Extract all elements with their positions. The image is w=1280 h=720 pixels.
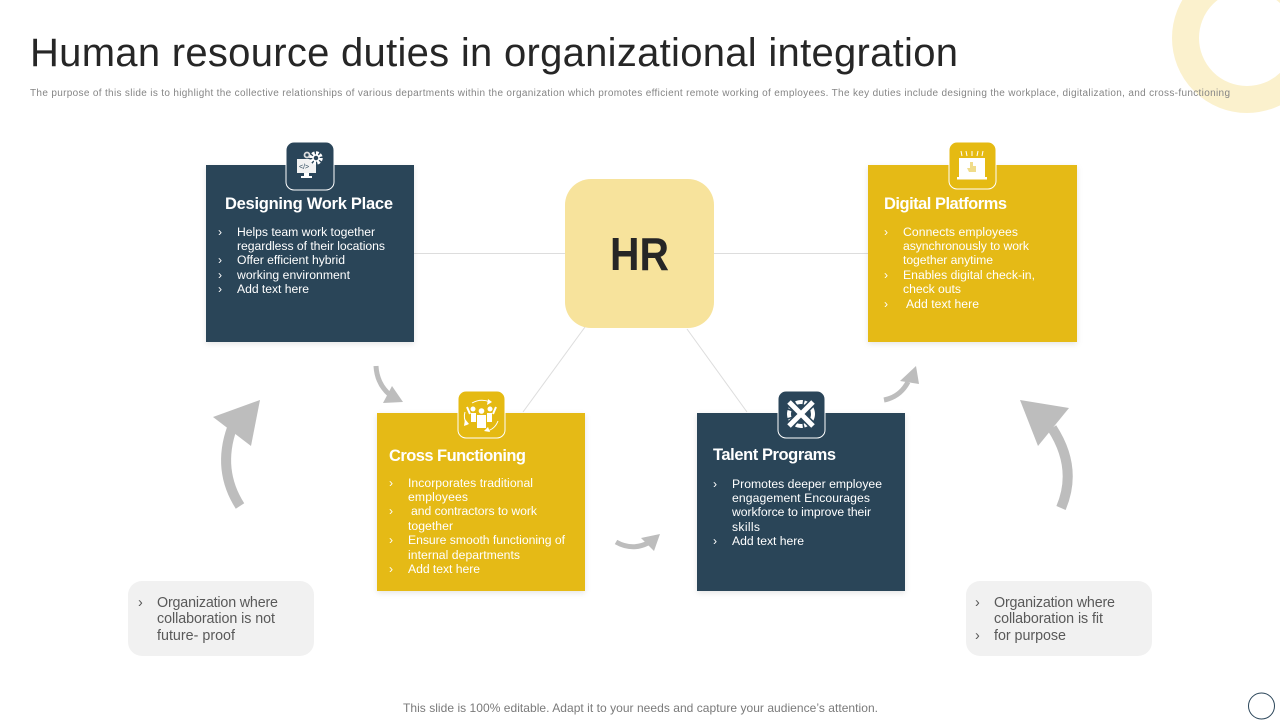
footer note: This slide is 100% editable. Adapt it to your needs and capture your audience’s attention.	[403, 701, 878, 715]
panel: designing work place	[206, 142, 414, 342]
bullet list: together anytime	[903, 253, 993, 267]
bullet list: Add text here	[237, 282, 309, 296]
callout: not future-proof	[128, 581, 314, 656]
bullet list: ›	[389, 533, 393, 547]
connector lines	[414, 254, 868, 412]
callout: fit for purpose	[966, 581, 1152, 656]
bullet list: Add text here	[906, 297, 979, 311]
bullet list: Offer efficient hybrid	[237, 253, 345, 267]
icon: laptop with touch	[949, 142, 996, 189]
callout: fit for purpose: ›	[975, 595, 980, 611]
bullet list: skills	[732, 520, 760, 534]
bullet list: ›	[884, 225, 888, 239]
bullet list: Enables digital check-in,	[903, 268, 1035, 282]
bullet list: employees	[408, 490, 468, 504]
bullet list: regardless of their locations	[237, 239, 385, 253]
callout: fit for purpose: Organization where	[994, 595, 1115, 611]
bullet list	[713, 477, 882, 548]
bullet list: Promotes deeper employee	[732, 477, 882, 491]
bullet list	[218, 225, 385, 296]
bullet list: Incorporates traditional	[408, 476, 533, 490]
bullet list: ›	[218, 253, 222, 267]
icon: team with cycle arrows	[458, 391, 505, 438]
subtitle: The purpose of this slide is to highlight the collective relationships of various departments within the organization which promotes efficient remote working of employees. The key duties include designing the workplace, digitalization, and cross-functioning	[30, 88, 1230, 99]
heading: Cross Functioning	[389, 447, 526, 465]
central HR block	[565, 179, 714, 328]
callout: not future-proof: Organization where	[157, 595, 278, 611]
callout: not future-proof: ›	[138, 595, 143, 611]
bullet list: ›	[884, 297, 888, 311]
page circle	[1248, 693, 1274, 719]
title: Human resource duties in organizational integration	[30, 31, 958, 75]
bullet list: Ensure smooth functioning of	[408, 533, 566, 547]
panel: cross functioning	[377, 391, 585, 591]
bullet list: Connects employees	[903, 225, 1018, 239]
heading: Digital Platforms	[884, 195, 1007, 213]
arrow: large right	[1020, 400, 1069, 508]
panel: digital platforms	[868, 142, 1077, 342]
central HR block: HR	[610, 228, 669, 280]
bullet list: Helps team work together	[237, 225, 375, 239]
bullet list: Add text here	[408, 562, 480, 576]
callout: not future-proof: future- proof	[157, 628, 235, 644]
bullet list: ›	[218, 225, 222, 239]
heading: Designing Work Place	[225, 195, 393, 213]
bullet list	[389, 476, 566, 576]
callout: fit for purpose: for purpose	[994, 628, 1066, 644]
bullet list: ›	[218, 282, 222, 296]
callout: fit for purpose: collaboration is fit	[994, 611, 1103, 627]
bullet list: ›	[389, 476, 393, 490]
bullet list: ›	[389, 562, 393, 576]
bullet list: Add text here	[732, 534, 804, 548]
callout: not future-proof: collaboration is not	[157, 611, 275, 627]
icon: computer with gears	[286, 142, 334, 190]
bullet list: check outs	[903, 282, 961, 296]
arrow: top-left small	[376, 366, 403, 403]
bullet list: asynchronously to work	[903, 239, 1030, 253]
bullet list: and contractors to work	[411, 504, 538, 518]
heading: Talent Programs	[713, 446, 836, 464]
bullet list: ›	[713, 534, 717, 548]
bullet list: together	[408, 519, 453, 533]
bullet list: internal departments	[408, 548, 520, 562]
bullet list: ›	[389, 504, 393, 518]
panel: talent programs	[697, 391, 905, 591]
icon: gear with crossed tools	[778, 391, 825, 438]
decorative ring	[1186, 0, 1280, 100]
arrow: large left	[213, 400, 260, 506]
bullet list: working environment	[236, 268, 351, 282]
arrow: bottom small	[616, 534, 660, 551]
bullet list: engagement Encourages	[732, 491, 870, 505]
bullet list: workforce to improve their	[731, 505, 871, 519]
callout: fit for purpose: ›	[975, 628, 980, 644]
bullet list: ›	[218, 268, 222, 282]
icon: computer with gears: </>	[299, 164, 309, 171]
bullet list	[884, 225, 1035, 311]
bullet list: ›	[884, 268, 888, 282]
arrow: top-right small	[884, 366, 919, 400]
bullet list: ›	[713, 477, 717, 491]
